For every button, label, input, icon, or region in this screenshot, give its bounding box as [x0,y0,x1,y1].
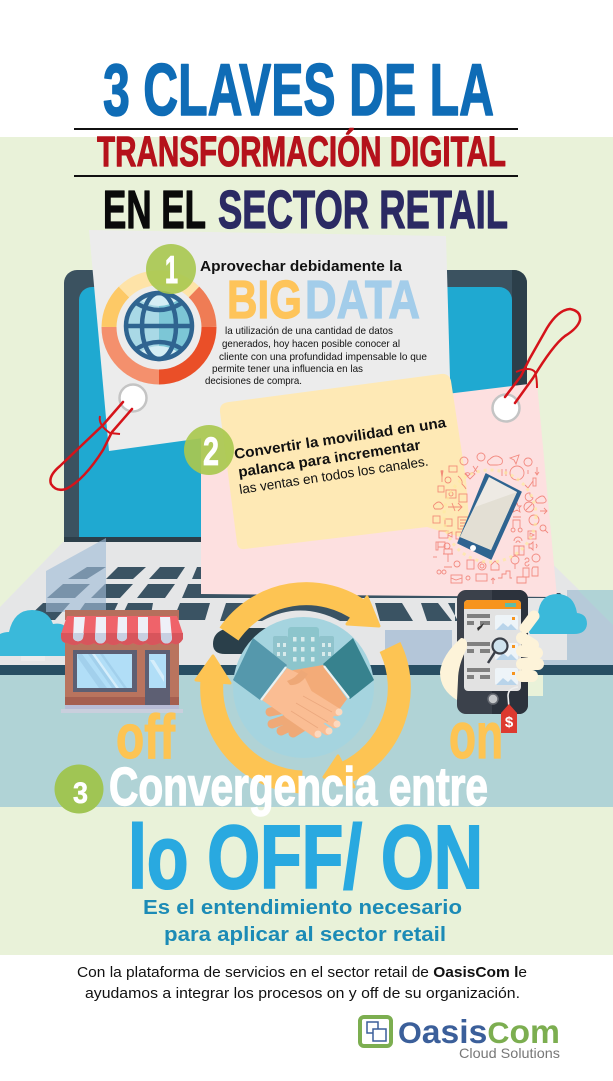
logo: OasisCom [360,1013,560,1061]
icon: number 1: 1 [165,249,178,292]
text block: step 3 [143,897,462,946]
icon: smartphone with app icons [433,453,548,584]
text block: step 1: generados, hoy hacen posible conocer al [222,338,400,350]
icon: right cloud [527,594,587,634]
text block: step 2 [233,415,448,497]
heading: step 3: lo OFF/ ON [128,808,483,908]
icon: number 3 [54,764,104,814]
heading: step 3 [109,757,488,908]
laptop illustration [0,270,613,807]
text block: step 1: decisiones de compra. [205,375,302,387]
icon: number 2 [184,425,234,475]
title [74,50,518,240]
icon: smartphone with hands: $ [505,714,514,731]
icon: number 3: 3 [73,777,88,810]
icon: handshake in circle [233,617,374,758]
icon: left tag hole and string [50,384,146,490]
text block: step 1: permite tener una influencia en las [212,363,363,375]
text block: step 1: la utilización de una cantidad de datos [225,325,393,337]
panel: pink paper [201,383,557,597]
label: on: on [449,699,503,772]
text block: step 3: Es el entendimiento necesario [143,897,462,919]
icon: number 2: 2 [203,430,219,474]
heading: step 1: BIG [227,270,302,330]
text block: step 2: Convertir la movilidad en una [233,415,448,463]
logo: OasisCom: OasisCom [398,1013,560,1050]
heading: step 1 [200,258,420,330]
label: off: off [116,703,175,772]
panel: bottom strip [0,807,613,955]
text block: step 3: para aplicar al sector retail [164,924,446,946]
icon: globe donut [109,278,209,377]
logo: OasisCom: Cloud Solutions [459,1045,560,1061]
panel: yellow note [220,374,469,549]
heading: step 3: Convergencia entre [109,757,488,817]
icon: storefront [61,610,183,713]
text block: step 2: las ventas en todos los canales. [238,454,429,497]
text block: step 1: cliente con una profundidad impensable lo que [219,351,427,363]
text block: step 2: palanca para incrementar [237,438,422,481]
title: EN EL [103,180,206,240]
icon: circular arrows [196,594,399,787]
panel: grey paper [89,230,450,451]
heading: step 1: Aprovechar debidamente la [200,258,403,275]
text block: footer [77,964,527,1002]
text block: footer: ayudamos a integrar los procesos on y off de su organización. [85,985,520,1002]
text block: step 1 [205,325,427,387]
icon: right tag hole and string [492,309,580,422]
text block: footer: Con la plataforma de servicios en el sector retail de OasisCom le [77,964,527,981]
icon: number 1 [146,244,196,294]
heading: step 1: DATA [305,270,420,330]
icon: left cloud [0,610,68,656]
icon: smartphone with hands [440,590,543,733]
